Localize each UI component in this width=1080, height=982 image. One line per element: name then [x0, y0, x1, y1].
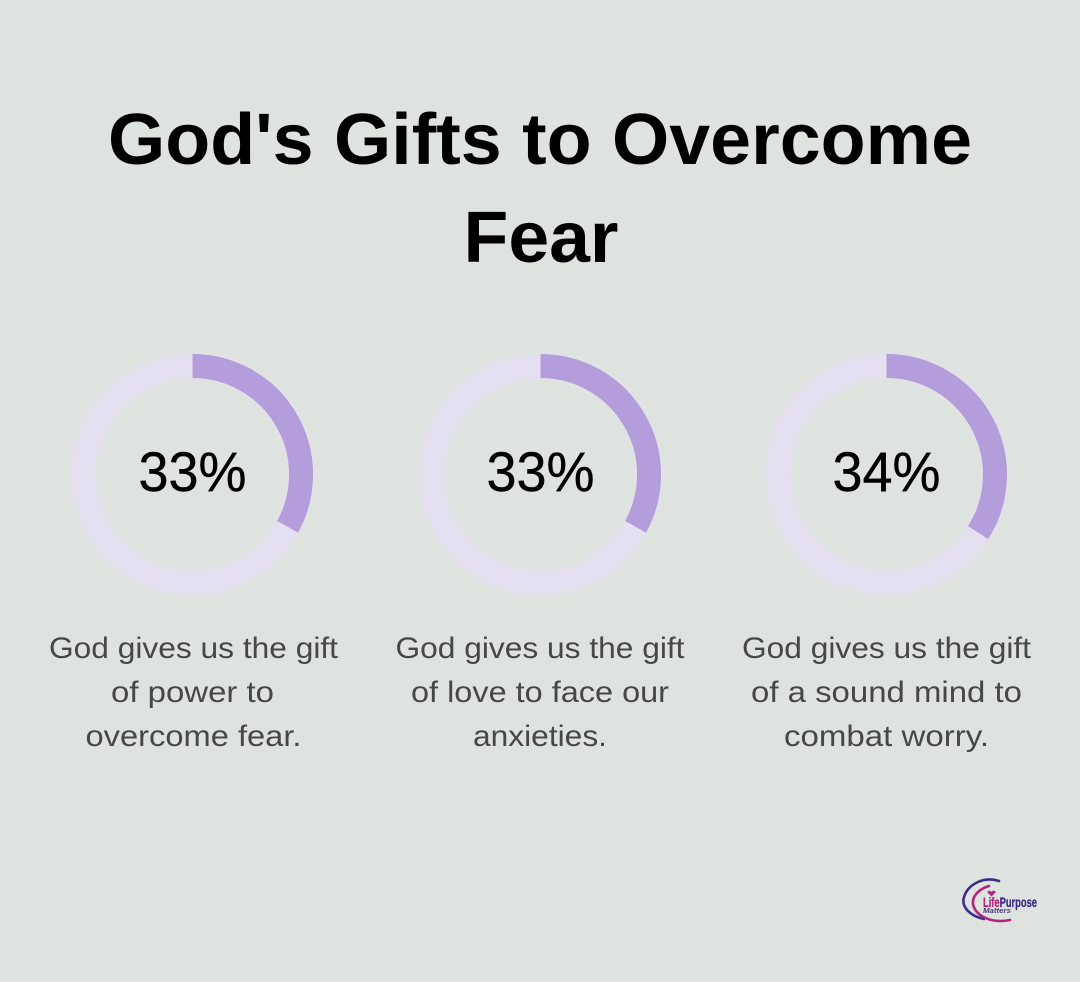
description: love: anxieties. [473, 720, 607, 753]
description: sound mind: of a sound mind to [751, 676, 1022, 709]
description: power: God gives us the gift [49, 632, 339, 665]
logo tagline: Matters [983, 906, 1011, 915]
logo wordmark: LifePurpose [983, 894, 1037, 910]
title [108, 100, 972, 278]
description: love: God gives us the gift [396, 632, 685, 665]
description: sound mind: God gives us the gift [742, 632, 1032, 665]
title: God's Gifts to Overcome [108, 100, 972, 180]
value: 33%: 33% [138, 440, 246, 503]
description: power [49, 632, 339, 753]
title: Fear [464, 198, 618, 278]
description: power: overcome fear. [86, 720, 302, 753]
donut chart: 33% [432, 366, 649, 583]
icon: logo arcs [963, 879, 1010, 921]
description: love: of love to face our [411, 676, 669, 709]
donut chart: 33% [84, 366, 301, 583]
value: 33%: 33% [486, 440, 594, 503]
description: power: of power to [111, 676, 274, 709]
panel: power gift [49, 366, 339, 753]
value: 34%: 34% [832, 440, 940, 503]
logo heart [987, 890, 996, 896]
description: sound mind [742, 632, 1032, 753]
description: love [396, 632, 685, 753]
logo: Life Purpose Matters [963, 879, 1037, 921]
description: sound mind: combat worry. [784, 720, 989, 753]
panel: sound mind gift [742, 366, 1032, 753]
donut chart: 34% [778, 366, 995, 583]
panel: love gift [396, 366, 685, 753]
